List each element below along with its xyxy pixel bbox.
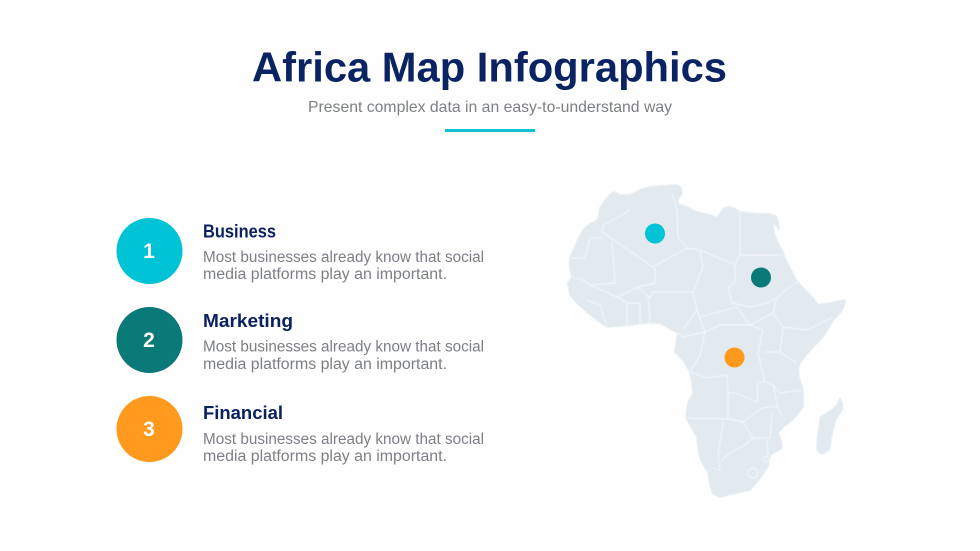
description: financial bbox=[203, 431, 484, 465]
heading: financial: Financial bbox=[203, 403, 283, 423]
description: business: Most businesses already know that social bbox=[203, 249, 484, 266]
description: marketing: Most businesses already know that social bbox=[203, 338, 484, 356]
description: marketing: media platforms play an important. bbox=[203, 356, 447, 373]
description: financial: Most businesses already know that social bbox=[203, 431, 484, 448]
number badge 1: 1 bbox=[143, 240, 155, 263]
number badge 2: 2 bbox=[143, 329, 155, 352]
map marker: orange bbox=[724, 348, 744, 368]
description: financial: media platforms play an important. bbox=[203, 448, 447, 465]
map marker: cyan bbox=[645, 224, 665, 244]
subtitle: Present complex data in an easy-to-understand way bbox=[308, 99, 672, 116]
item 1: business bbox=[116, 218, 484, 284]
africa map bbox=[568, 185, 845, 497]
title: Africa Map Infographics bbox=[252, 44, 727, 90]
title accent bar bbox=[445, 129, 535, 132]
number badge 1 bbox=[116, 218, 182, 284]
map marker: teal bbox=[751, 268, 771, 288]
number badge 3: 3 bbox=[143, 418, 155, 441]
country borders bbox=[572, 193, 833, 478]
heading: marketing: Marketing bbox=[203, 311, 293, 331]
item 2: marketing bbox=[116, 307, 484, 373]
number badge 3 bbox=[116, 396, 182, 462]
description: business bbox=[203, 249, 484, 283]
description: marketing bbox=[203, 338, 484, 373]
item 3: financial bbox=[116, 396, 484, 465]
description: business: media platforms play an important. bbox=[203, 266, 447, 283]
madagascar bbox=[816, 397, 843, 454]
heading: business: Business bbox=[203, 222, 276, 242]
mainland silhouette bbox=[568, 185, 845, 497]
number badge 2 bbox=[116, 307, 182, 373]
